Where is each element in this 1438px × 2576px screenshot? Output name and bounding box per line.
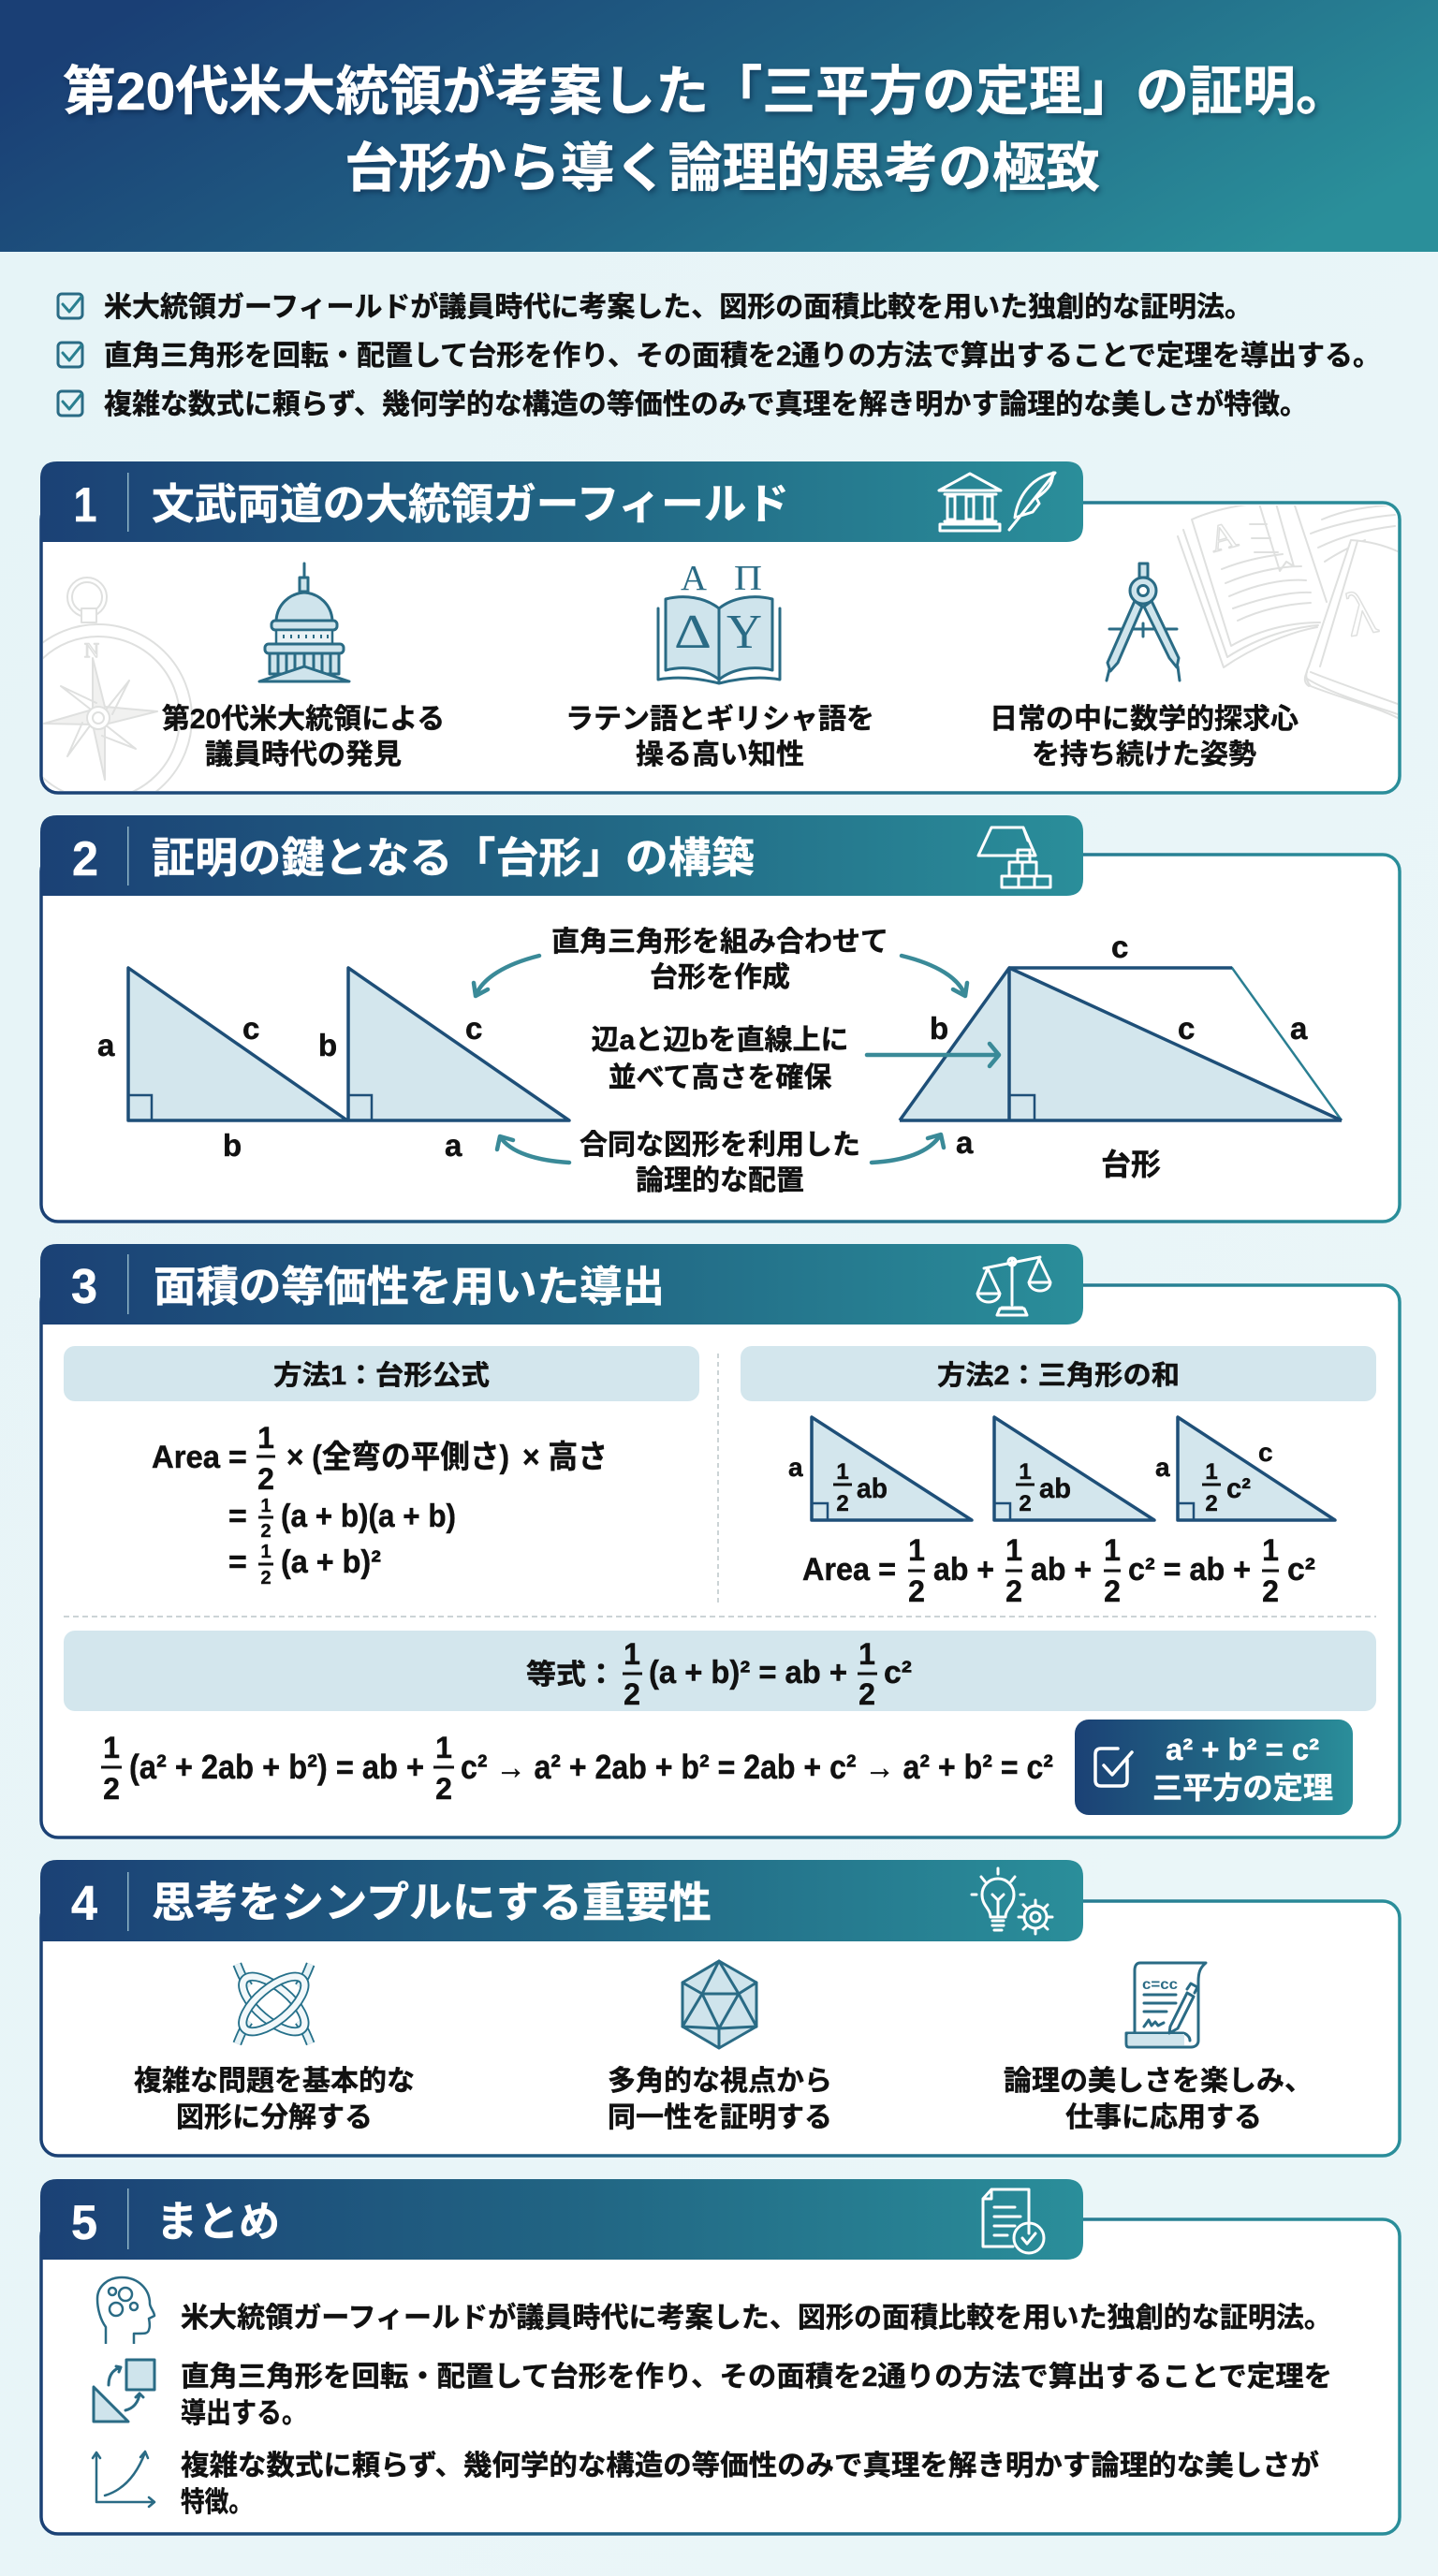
section tab 3: 面積の等価性を用いた導出 — [154, 1263, 665, 1310]
bullet 3: 複雑な数式に頼らず、幾何学的な構造の等価性のみで真理を解き明かす論理的な美しさが特徴。 — [104, 388, 1308, 420]
icon: document check — [983, 2189, 1044, 2253]
method 1 formula: 2 — [260, 1568, 271, 1588]
text: congruent figures — [580, 1130, 860, 1196]
label: beauty of logic — [1004, 2066, 1313, 2133]
method 1 — [64, 1346, 699, 1588]
triangle: one half ab: 2 — [836, 1491, 849, 1516]
trapezoid diagram: a — [956, 1125, 974, 1160]
section tab 2: 証明の鍵となる「台形」の構築 — [152, 834, 755, 882]
section tab 5: 5 — [71, 2196, 97, 2250]
label: decompose: 図形に分解する — [176, 2102, 373, 2133]
label: beauty of logic: 仕事に応用する — [1065, 2102, 1262, 2133]
triangle: one half c squared: c² — [1226, 1473, 1251, 1504]
icon: capitol — [259, 564, 349, 681]
text: summary 2 — [181, 2362, 1332, 2429]
method 2 formula: ab + — [1031, 1552, 1092, 1588]
method 2 formula — [802, 1533, 1315, 1608]
trapezoid diagram: 台形 — [1101, 1148, 1161, 1181]
equation band — [64, 1631, 1376, 1711]
derivation line — [101, 1731, 1053, 1806]
watermark: compass and books — [43, 505, 1398, 791]
method 1 formula: × 高さ — [522, 1440, 608, 1475]
method 1 formula: 1 — [260, 1542, 271, 1562]
triangle right — [318, 968, 569, 1163]
text: summary 1: 米大統領ガーフィールドが議員時代に考案した、図形の面積比較を用いた独創的な証明法。 — [181, 2302, 1332, 2334]
equation band: 2 — [858, 1677, 875, 1711]
icon: greek book: Α — [681, 559, 708, 598]
derivation line: 1 — [103, 1731, 120, 1764]
text: summary 3: 複雑な数式に頼らず、幾何学的な構造の等価性のみで真理を解き明かす論理的な美しさが — [181, 2450, 1319, 2481]
label: column 1: 第20代米大統領による — [162, 704, 445, 735]
text: congruent figures: 論理的な配置 — [636, 1165, 804, 1196]
panel: section 2 — [40, 815, 1400, 1222]
equation band: 等式： — [526, 1660, 616, 1690]
method 1 formula: Area — [152, 1440, 221, 1475]
derivation line: 2 — [435, 1772, 452, 1806]
icon: triangle to square — [94, 2360, 154, 2422]
label: multiple views: 多角的な視点から — [608, 2066, 832, 2097]
result callout: a² + b² = c² — [1166, 1733, 1319, 1766]
equation band: 1 — [858, 1637, 875, 1671]
icon: scroll with formula: c=cc — [1142, 1977, 1178, 1993]
method 2 formula: 2 — [1262, 1574, 1279, 1608]
derivation line: 2 — [103, 1772, 120, 1806]
triangle: one half ab — [788, 1417, 972, 1520]
method 1 formula: 2 — [260, 1521, 271, 1542]
method 1 formula — [152, 1421, 608, 1588]
method 1 formula: 1 — [260, 1496, 271, 1516]
section tab 1: 文武両道の大統領ガーフィールド — [152, 480, 789, 528]
title — [63, 62, 1349, 198]
triangle: one half c squared: c — [1258, 1438, 1273, 1467]
label: column 1: 議員時代の発見 — [205, 739, 402, 770]
triangle left: c — [242, 1011, 259, 1046]
panel: section 3 — [40, 1244, 1400, 1837]
label: decompose: 複雑な問題を基本的な — [134, 2066, 415, 2097]
equation band: c² — [884, 1655, 912, 1690]
icon: greek book: Υ — [726, 606, 762, 659]
panel: section 4 — [40, 1860, 1400, 2156]
watermark: compass and books: N — [84, 638, 99, 662]
method 2 formula: 2 — [1005, 1574, 1022, 1608]
panel: section 1 — [5, 461, 1400, 812]
label: column 3 — [990, 704, 1299, 770]
method 1 formula: 2 — [257, 1462, 274, 1496]
section tab 2: 2 — [72, 832, 98, 886]
triangle: one half ab: a — [788, 1453, 803, 1482]
triangle: one half ab second: 1 — [1019, 1459, 1032, 1485]
label: beauty of logic: 論理の美しさを楽しみ、 — [1004, 2066, 1313, 2097]
bullet 1: 米大統領ガーフィールドが議員時代に考案した、図形の面積比較を用いた独創的な証明法。 — [104, 291, 1253, 323]
triangle: one half c squared — [1155, 1417, 1335, 1520]
trapezoid diagram: c — [1111, 929, 1128, 964]
icon: polyhedron — [682, 1961, 756, 2048]
method 1 formula: = — [228, 1544, 247, 1580]
text: summary 2: 導出する。 — [181, 2398, 307, 2429]
icon: bulb and gear — [972, 1868, 1052, 1934]
text: align sides: 並べて高さを確保 — [609, 1062, 831, 1093]
icon: check box — [1095, 1749, 1132, 1786]
bullet 2: 直角三角形を回転・配置して台形を作り、その面積を2通りの方法で算出することで定理を導出する。 — [104, 341, 1381, 372]
method 2 formula: c² — [1287, 1552, 1315, 1588]
section tab 2 — [40, 815, 1083, 896]
section tab 1: 1 — [73, 478, 97, 533]
result callout: 三平方の定理 — [1152, 1771, 1333, 1805]
method 1 formula: = — [228, 1499, 247, 1534]
method 2 formula: 2 — [1104, 1574, 1121, 1608]
panel: section 5 — [40, 2179, 1400, 2534]
triangle: one half ab second: 2 — [1019, 1491, 1032, 1516]
method 2 formula: c² = ab + — [1128, 1552, 1251, 1588]
arrow: top right — [902, 956, 967, 996]
text: combine triangles: 台形を作成 — [650, 962, 790, 993]
title: 台形から導く論理的思考の極致 — [345, 139, 1100, 198]
triangle: one half c squared: a — [1155, 1453, 1170, 1482]
label: decompose — [134, 2066, 415, 2133]
section tab 4 — [40, 1860, 1083, 1941]
label: multiple views — [608, 2066, 832, 2133]
trapezoid diagram: a — [1290, 1011, 1308, 1046]
method 1 formula: × (全弯の平側さ) — [286, 1440, 509, 1475]
triangle: one half ab second — [994, 1417, 1154, 1520]
method 1 formula: (a + b)² — [281, 1544, 381, 1580]
result callout — [1075, 1720, 1353, 1815]
section tab 3: 3 — [71, 1260, 97, 1314]
text: align sides: 辺aと辺bを直線上に — [591, 1025, 849, 1056]
label: column 3: 日常の中に数学的探求心 — [990, 704, 1299, 735]
method 2 formula: 1 — [1262, 1533, 1279, 1567]
icon: knot — [234, 1964, 314, 2043]
method 1 heading — [64, 1346, 699, 1401]
arrow: bottom right — [872, 1134, 944, 1163]
section tab 5: まとめ — [156, 2198, 280, 2246]
equation band: 2 — [624, 1677, 640, 1711]
section tab 4: 4 — [71, 1877, 97, 1931]
triangle left: b — [223, 1128, 242, 1163]
method 2 formula: 1 — [1005, 1533, 1022, 1567]
equation band: 1 — [624, 1637, 640, 1671]
text: summary 2: 直角三角形を回転・配置して台形を作り、その面積を2通りの方法で算出することで定理を — [181, 2362, 1332, 2393]
method 2 formula: 2 — [908, 1574, 925, 1608]
text: align sides — [591, 1025, 849, 1093]
trapezoid diagram — [900, 929, 1342, 1181]
equation band: (a + b)² = ab + — [649, 1655, 847, 1690]
label: column 3: を持ち続けた姿勢 — [1032, 739, 1256, 770]
label: column 2: 操る高い知性 — [636, 739, 804, 770]
derivation line: c² → a² + 2ab + b² = 2ab + c² → a² + b² = c² — [461, 1748, 1053, 1786]
watermark: compass and books: λ — [1341, 578, 1382, 651]
arrow: top left — [474, 956, 539, 996]
icon: balance scales — [977, 1257, 1050, 1315]
header banner — [0, 0, 1438, 252]
label: column 2 — [565, 704, 874, 770]
triangle: one half c squared: 1 — [1205, 1459, 1218, 1485]
title: 第20代米大統領が考案した「三平方の定理」の証明。 — [63, 62, 1349, 122]
method 1 formula: = — [228, 1440, 247, 1475]
triangle right: a — [445, 1128, 462, 1163]
method 2 formula: 1 — [908, 1533, 925, 1567]
method 2 formula: Area = — [802, 1552, 896, 1588]
method 2 — [741, 1346, 1376, 1608]
text: combine triangles: 直角三角形を組み合わせて — [551, 927, 888, 958]
icon: growth graph — [93, 2452, 154, 2507]
method 1 formula: (a + b)(a + b) — [281, 1499, 456, 1534]
icon: scroll with formula — [1126, 1963, 1206, 2047]
arrow: bottom left — [497, 1136, 569, 1163]
section tab 4: 思考をシンプルにする重要性 — [152, 1879, 712, 1926]
triangle: one half c squared: 2 — [1205, 1491, 1218, 1516]
icon: trapezoid and bricks — [978, 827, 1050, 887]
triangle left — [97, 968, 347, 1163]
text: summary 3 — [181, 2450, 1319, 2518]
icon: temple and quill — [939, 473, 1055, 531]
text: summary 3: 特徴。 — [181, 2487, 253, 2518]
triangle left: a — [97, 1028, 115, 1062]
method 2 formula: 1 — [1104, 1533, 1121, 1567]
label: column 2: ラテン語とギリシャ語を — [565, 704, 874, 735]
text: combine triangles — [551, 927, 888, 993]
method 1 formula: 1 — [257, 1421, 274, 1455]
icon: greek book — [658, 559, 780, 683]
triangle right: b — [318, 1028, 337, 1062]
trapezoid diagram: b — [930, 1011, 948, 1046]
derivation line: (a² + 2ab + b²) = ab + — [129, 1748, 424, 1786]
label: multiple views: 同一性を証明する — [608, 2102, 832, 2133]
section tab 3 — [40, 1244, 1083, 1325]
section tab 1 — [40, 461, 1083, 542]
triangle: one half ab: 1 — [836, 1459, 849, 1485]
watermark: compass and books: A — [1205, 513, 1241, 561]
intro bullet list — [58, 291, 1381, 420]
trapezoid diagram: c — [1178, 1011, 1195, 1046]
triangle: one half ab second: ab — [1039, 1473, 1071, 1504]
section tab 5 — [40, 2179, 1083, 2260]
text: congruent figures: 合同な図形を利用した — [580, 1130, 860, 1161]
method 2 heading — [741, 1346, 1376, 1401]
icon: drafting compass — [1107, 564, 1180, 681]
arrow: middle — [867, 1044, 999, 1066]
label: column 1 — [162, 704, 445, 770]
icon: brain head — [97, 2277, 154, 2344]
icon: greek book: Π — [734, 559, 762, 598]
derivation line: 1 — [435, 1731, 452, 1764]
triangle right: c — [465, 1011, 482, 1046]
method 2 formula: ab + — [933, 1552, 994, 1588]
method 2 heading: 方法2：三角形の和 — [937, 1360, 1180, 1391]
triangle: one half ab: ab — [857, 1473, 888, 1504]
icon: greek book: Δ — [674, 606, 712, 659]
method 1 heading: 方法1：台形公式 — [273, 1360, 490, 1391]
